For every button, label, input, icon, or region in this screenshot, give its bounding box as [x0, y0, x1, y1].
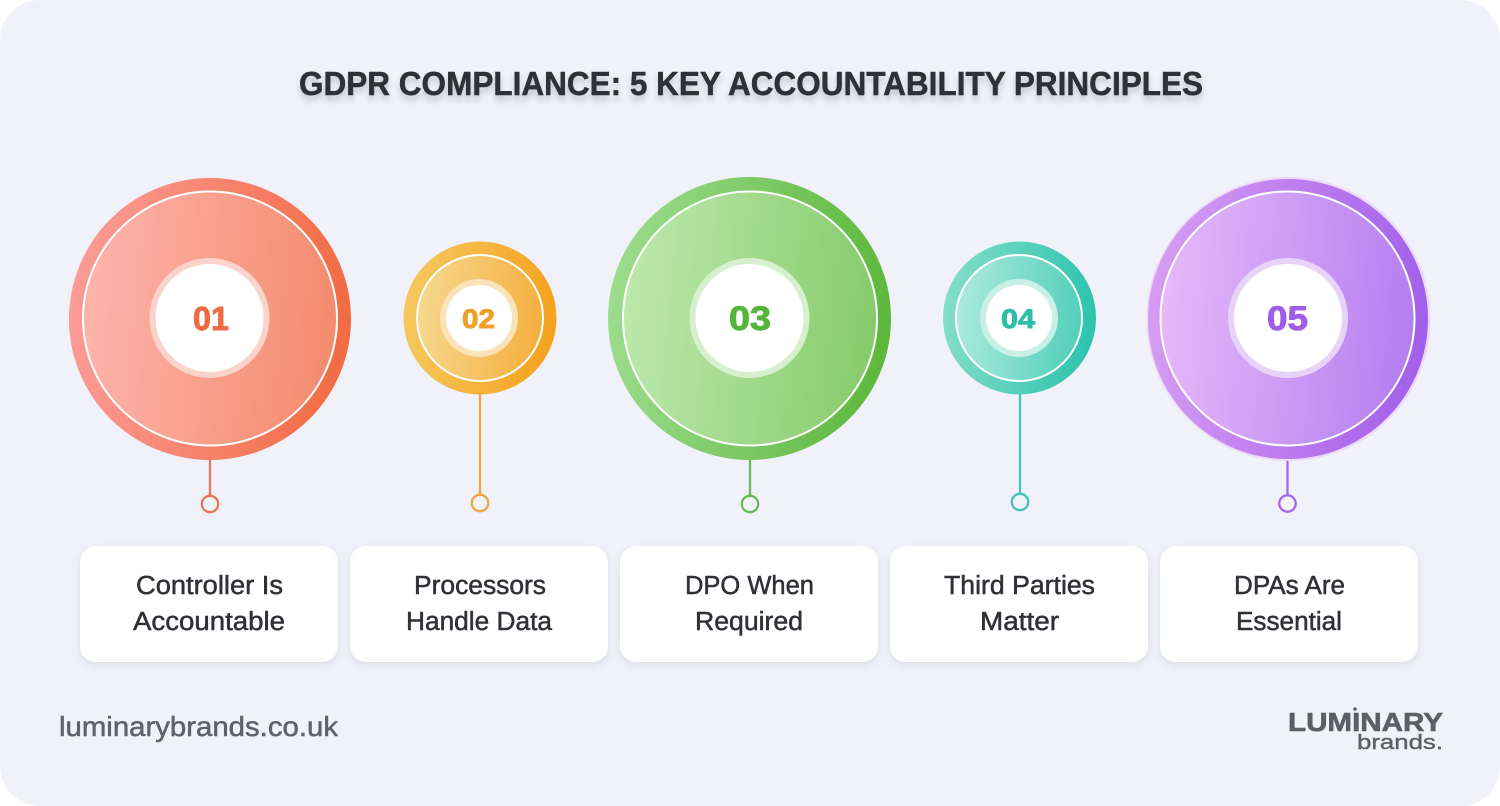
label 01: Controller Is	[136, 572, 283, 600]
title: GDPR COMPLIANCE: 5 KEY ACCOUNTABILITY PRINCIPLES	[299, 66, 1203, 103]
label 03: Required	[695, 608, 803, 636]
disc 02	[404, 242, 556, 394]
website url: luminarybrands.co.uk	[59, 711, 339, 742]
principle 04 circle	[943, 242, 1096, 510]
disc 05	[1146, 177, 1430, 461]
number 01: 01	[193, 300, 229, 337]
label 04: Matter	[980, 608, 1060, 636]
disc 03	[608, 177, 891, 460]
number 05: 05	[1267, 300, 1308, 338]
disc 01	[69, 178, 351, 460]
label 05	[1234, 572, 1345, 636]
label 02: Handle Data	[406, 608, 553, 636]
card 02	[350, 546, 608, 662]
card 04	[890, 546, 1148, 662]
connector 05	[1279, 459, 1296, 512]
number 02: 02	[462, 304, 495, 334]
logo	[1288, 707, 1443, 754]
connector 03	[742, 459, 758, 512]
label 01	[133, 572, 285, 636]
label 02: Processors	[414, 572, 546, 600]
number 03: 03	[729, 300, 771, 338]
label 01: Accountable	[133, 608, 285, 636]
principle 03 circle	[608, 177, 891, 512]
connector 01	[202, 459, 218, 512]
disc 04	[943, 242, 1096, 394]
logo: LUMINARY	[1288, 707, 1443, 737]
label 02	[406, 572, 553, 636]
label 03	[685, 572, 814, 636]
logo: brands.	[1357, 732, 1443, 754]
number 04: 04	[1001, 304, 1035, 334]
principle 05 circle	[1146, 177, 1430, 512]
card 05	[1160, 546, 1418, 662]
card 01	[80, 546, 338, 662]
principle 01 circle	[69, 178, 351, 512]
label 05: Essential	[1236, 608, 1342, 636]
label 04: Third Parties	[944, 572, 1095, 600]
label 05: DPAs Are	[1234, 572, 1345, 600]
principle 02 circle	[404, 242, 556, 511]
connector 04	[1012, 393, 1028, 510]
label 03: DPO When	[685, 572, 814, 600]
card 03	[620, 546, 878, 662]
connector 02	[472, 393, 488, 511]
label 04	[944, 572, 1095, 636]
